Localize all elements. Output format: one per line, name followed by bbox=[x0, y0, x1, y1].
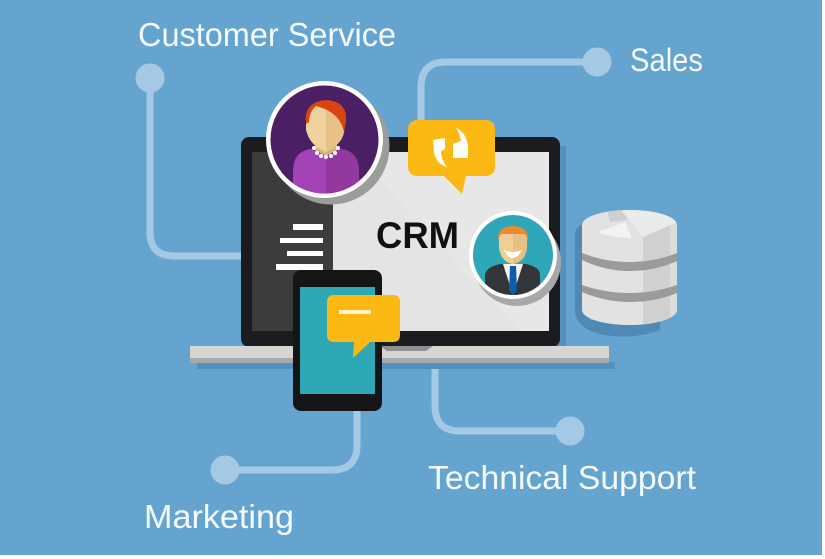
avatar: woman bbox=[266, 81, 390, 204]
connector: sales bbox=[421, 51, 608, 125]
connector: customer service bbox=[139, 67, 245, 256]
database cylinder bbox=[575, 205, 682, 337]
speech bubble: phone bbox=[408, 120, 495, 194]
icon: phone handset bbox=[433, 128, 468, 167]
label: customer service: Customer Service bbox=[138, 16, 396, 53]
smartphone bbox=[293, 270, 400, 411]
laptop bbox=[190, 137, 615, 369]
label: marketing: Marketing bbox=[144, 498, 294, 535]
connector: technical support bbox=[435, 360, 581, 442]
label: technical support: Technical Support bbox=[428, 459, 696, 496]
CRM title: CRM bbox=[376, 215, 459, 256]
sidebar menu lines bbox=[276, 224, 323, 270]
label: sales: Sales bbox=[630, 42, 703, 78]
speech bubble: message bbox=[327, 295, 400, 358]
connector: marketing bbox=[214, 405, 357, 481]
avatar: man bbox=[469, 211, 561, 306]
